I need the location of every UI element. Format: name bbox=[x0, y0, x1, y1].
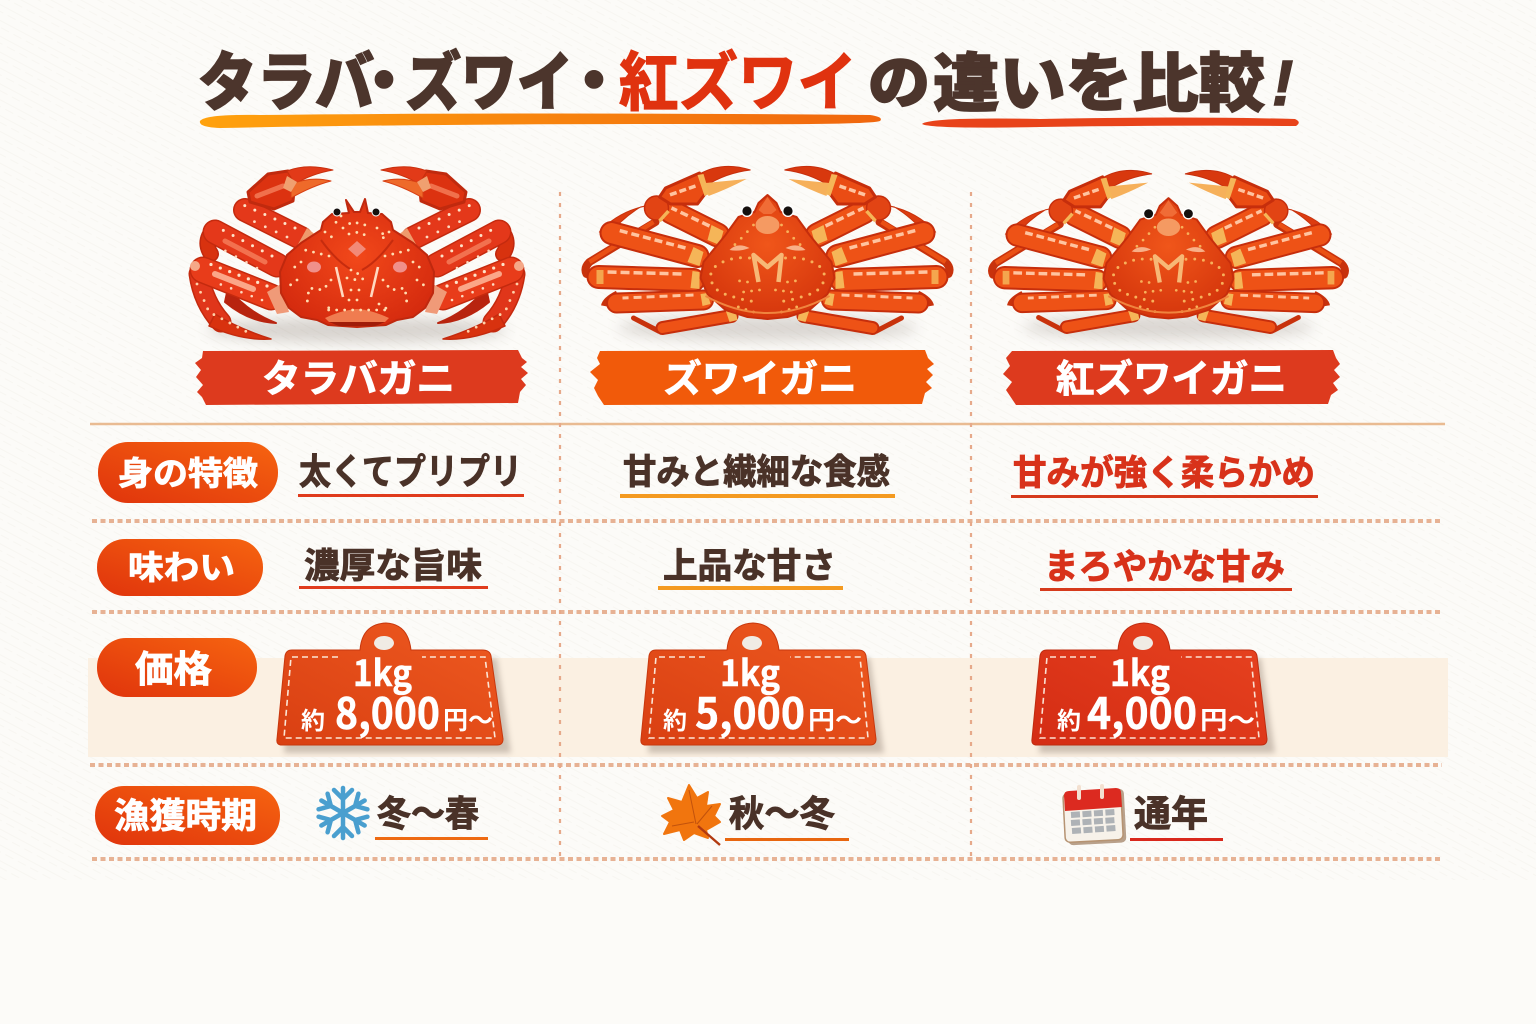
banner: 紅ズワイガニ: 紅ズワイガニ bbox=[1056, 358, 1287, 401]
row label: 漁獲時期: 漁獲時期 bbox=[114, 797, 257, 836]
price tag: ズワイガニ bbox=[641, 623, 884, 753]
price tag: タラバガニ bbox=[277, 623, 511, 753]
row label: 味わい bbox=[97, 539, 263, 596]
taste: 紅ズワイガニ: まろやかな甘み bbox=[1044, 548, 1285, 587]
price tag: 紅ズワイガニ: 4,000 bbox=[1087, 680, 1197, 742]
season: ズワイガニ: 秋〜冬 bbox=[729, 793, 835, 834]
banner: ズワイガニ bbox=[590, 350, 934, 405]
row label: 漁獲時期 bbox=[95, 786, 280, 845]
row label: 味わい: 味わい bbox=[128, 549, 235, 586]
row label: 身の特徴: 身の特徴 bbox=[118, 455, 258, 492]
crab: タラバガニ bbox=[190, 167, 524, 343]
title: 違いを比較 bbox=[933, 48, 1265, 120]
price tag: 紅ズワイガニ: 1kg bbox=[1110, 645, 1170, 697]
price tag: タラバガニ: 円〜 bbox=[443, 707, 493, 735]
texture: 紅ズワイガニ: 甘みが強く柔らかめ bbox=[1013, 454, 1315, 493]
price tag: タラバガニ: 1kg bbox=[353, 645, 412, 697]
price tag: ズワイガニ: 約 bbox=[663, 708, 687, 735]
price tag: タラバガニ: 約 bbox=[301, 708, 325, 735]
title: ・ bbox=[353, 48, 415, 117]
banner: 紅ズワイガニ bbox=[1003, 350, 1340, 405]
season: タラバガニ: 冬〜春 bbox=[377, 793, 479, 834]
icon: calendar bbox=[1063, 786, 1126, 845]
taste: ズワイガニ: 上品な甘さ bbox=[663, 547, 836, 586]
price tag: ズワイガニ: 5,000 bbox=[695, 680, 805, 742]
row label: 身の特徴 bbox=[98, 442, 278, 503]
title: の bbox=[868, 51, 930, 116]
icon: snowflake bbox=[317, 788, 369, 838]
price tag: 紅ズワイガニ: 約 bbox=[1057, 708, 1081, 735]
title underline: red bbox=[922, 118, 1299, 128]
price tag: 紅ズワイガニ bbox=[1032, 623, 1275, 753]
texture: ズワイガニ: 甘みと繊細な食感 bbox=[623, 453, 890, 492]
row label: 価格: 価格 bbox=[135, 649, 212, 690]
crab: 紅ズワイガニ bbox=[992, 170, 1345, 340]
price tag: ズワイガニ: 円〜 bbox=[808, 707, 862, 735]
crab: ズワイガニ bbox=[586, 166, 950, 341]
price tag: 紅ズワイガニ: 円〜 bbox=[1200, 707, 1255, 735]
title: タラバ bbox=[198, 47, 374, 119]
banner: タラバガニ: タラバガニ bbox=[262, 359, 455, 401]
title: ・ bbox=[563, 48, 625, 117]
season: 紅ズワイガニ bbox=[1130, 793, 1223, 841]
row label: 価格 bbox=[97, 638, 257, 697]
price tag: タラバガニ: 8,000 bbox=[335, 680, 440, 742]
title bbox=[198, 47, 1299, 128]
title: 紅ズワイ bbox=[619, 47, 857, 119]
banner: タラバガニ bbox=[195, 350, 528, 405]
icon: maple leaf bbox=[662, 785, 720, 845]
title: ズワイ bbox=[405, 47, 573, 119]
title underline: orange bbox=[200, 114, 881, 128]
banner: ズワイガニ: ズワイガニ bbox=[663, 358, 857, 401]
season: 紅ズワイガニ: 通年 bbox=[1134, 793, 1208, 834]
texture: タラバガニ: 太くてプリプリ bbox=[299, 451, 522, 492]
taste: タラバガニ: 濃厚な旨味 bbox=[304, 547, 482, 586]
eyes bbox=[333, 208, 380, 216]
price tag: ズワイガニ: 1kg bbox=[720, 645, 780, 697]
table grid lines bbox=[88, 192, 1448, 859]
carapace bbox=[280, 199, 434, 327]
title: ! bbox=[1272, 47, 1293, 119]
